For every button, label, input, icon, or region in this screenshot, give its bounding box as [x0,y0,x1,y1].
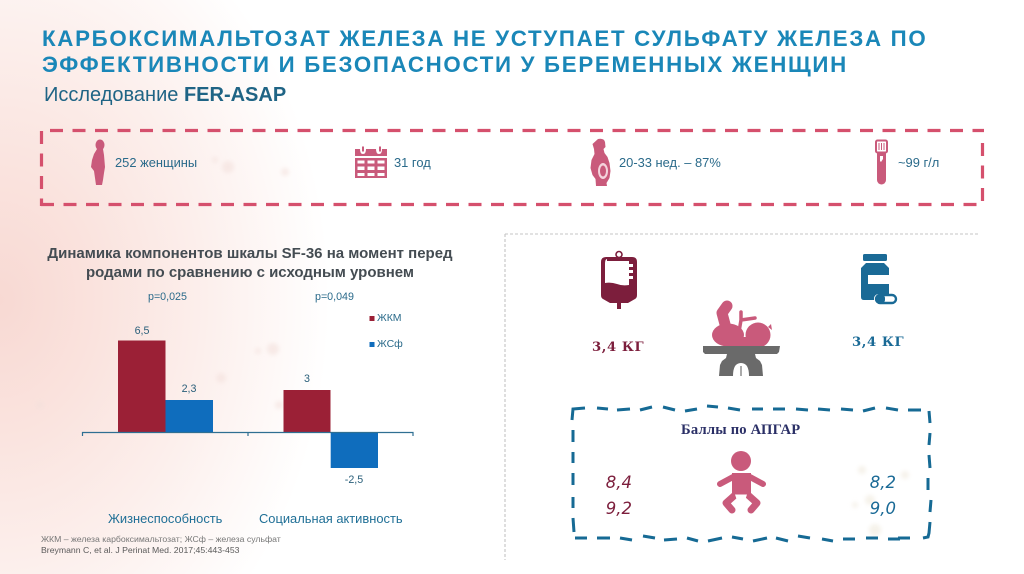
icon: baby on scale [703,306,780,376]
footnote [41,534,281,555]
footnote: ЖКМ – железа карбоксимальтозат; ЖСф – железа сульфат [41,534,281,544]
panel: study population [40,128,984,206]
icon: test tube [876,140,887,184]
axis [82,432,413,436]
stat: gestation: 20-33 нед. – 87% [619,155,721,170]
value -2,5: -2,5 [345,474,363,486]
legend: ЖКМ: ЖКМ [377,312,402,324]
stat: hemoglobin: ~99 г/л [898,155,939,170]
stat: women: 252 женщины [115,155,197,170]
value: iron carboxymaltose weight: 3,4 КГ [592,340,644,355]
value 3: 3 [304,373,310,385]
values: iron sulfate: 8,2 [870,473,896,492]
legend swatches [370,316,374,321]
values: iron sulfate [870,473,896,518]
icon: woman [91,140,105,185]
chart heading [47,245,453,281]
values: iron carboxymaltose: 9,2 [606,499,632,518]
title: ЭФФЕКТИВНОСТИ И БЕЗОПАСНОСТИ У БЕРЕМЕННЫХ ЖЕНЩИН [42,52,848,77]
value: iron sulfate weight: 3,4 КГ [852,335,904,350]
category: vitality: Жизнеспособность [108,511,222,526]
dashed frame [41,130,984,206]
category: social activity: Социальная активность [259,511,403,526]
icon: calendar [355,146,387,178]
title: КАРБОКСИМАЛЬТОЗАТ ЖЕЛЕЗА НЕ УСТУПАЕТ СУЛЬФАТУ ЖЕЛЕЗА ПО [42,26,927,51]
p-value 1: p=0,025 [148,291,187,303]
icon: pill bottle [861,254,896,303]
legend: ЖСф: ЖСф [377,338,403,350]
p-value 2: p=0,049 [315,291,354,303]
chart heading: родами по сравнению с исходным уровнем [86,264,414,281]
value 6,5: 6,5 [135,325,149,337]
panel: Apgar scores [570,404,932,542]
subtitle: Исследование FER-ASAP [44,84,286,106]
chart heading: Динамика компонентов шкалы SF-36 на момент перед [47,245,453,262]
heading: Apgar: Баллы по АПГАР [681,422,800,438]
stat: age: 31 год [394,155,431,170]
bars [118,340,378,468]
values: iron carboxymaltose [606,473,632,518]
icon: baby [720,451,763,510]
icon: pregnant woman [590,139,610,186]
dashed frame [572,406,931,541]
values: iron carboxymaltose: 8,4 [606,473,632,492]
bar chart [82,291,414,526]
value 2,3: 2,3 [182,383,196,395]
panel: birth weight [592,250,904,376]
icon: infusion bag [601,252,637,309]
footnote: Breymann C, et al. J Perinat Med. 2017;45:443-453 [41,545,239,555]
title [42,26,927,77]
values: iron sulfate: 9,0 [870,499,896,518]
